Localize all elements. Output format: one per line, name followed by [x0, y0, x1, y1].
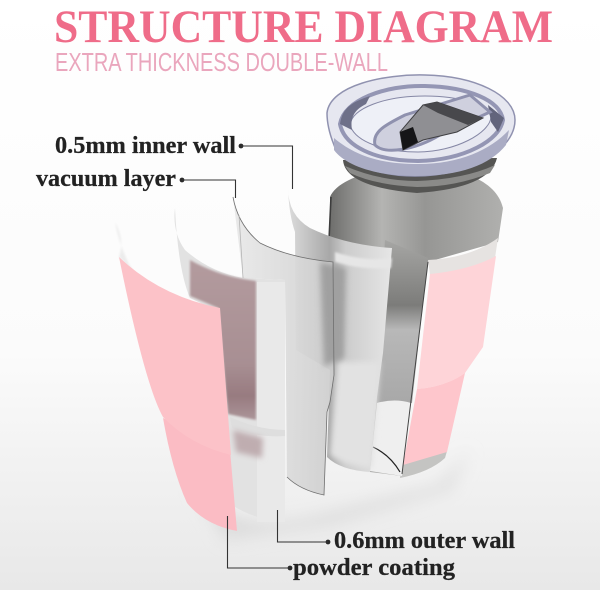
subtitle: EXTRA THICKNESS DOUBLE-WALL — [55, 47, 388, 77]
title: STRUCTURE DIAGRAM — [54, 1, 553, 53]
lower light area — [330, 362, 380, 468]
inner floor arc — [373, 447, 400, 472]
inner ring — [340, 86, 503, 161]
layer: vacuum sheet — [233, 197, 346, 495]
lower rim band — [334, 130, 509, 176]
white rim — [428, 238, 498, 275]
opening — [350, 96, 491, 152]
pink reflection — [190, 260, 256, 420]
base silver — [400, 451, 447, 478]
layer: powder coating sheet — [115, 222, 237, 531]
layer: inner wall sheet — [288, 188, 392, 472]
slider track — [375, 95, 490, 150]
lower pink body — [163, 418, 237, 531]
tumbler body — [329, 167, 503, 478]
lid — [327, 75, 515, 193]
layer: outer wall sheet — [174, 208, 285, 522]
callout: 0.5mm inner wall: 0.5mm inner wall — [55, 133, 236, 159]
callout: 0.6mm outer wall — [278, 510, 515, 554]
floor shadow — [190, 450, 470, 540]
steel interior — [330, 167, 503, 476]
callout: 0.6mm outer wall: 0.6mm outer wall — [334, 528, 515, 554]
outer clear rim — [327, 75, 515, 176]
shadow under band — [233, 430, 263, 458]
rim edge at left — [329, 197, 331, 240]
upper pink panel — [119, 257, 231, 455]
lower pink body — [403, 373, 465, 465]
callout: powder coating: powder coating — [293, 555, 455, 581]
steel strip in the opening — [375, 240, 428, 403]
pink edge line — [402, 262, 428, 474]
reflected rim band — [335, 252, 392, 268]
callout: powder coating — [228, 516, 455, 581]
callout: 0.5mm inner wall — [55, 133, 292, 189]
white strip — [257, 282, 285, 522]
dark slider piece — [400, 102, 483, 150]
callout: vacuum layer: vacuum layer — [36, 166, 176, 192]
shaded rim arcs — [340, 96, 370, 130]
vacuum sheet outline — [233, 197, 334, 495]
callout: vacuum layer — [36, 166, 236, 198]
inner floor — [370, 400, 411, 476]
sheet shadow on right side — [320, 262, 346, 366]
reflected band — [230, 417, 285, 436]
upper pink body — [417, 256, 496, 389]
dark gasket — [343, 158, 497, 193]
